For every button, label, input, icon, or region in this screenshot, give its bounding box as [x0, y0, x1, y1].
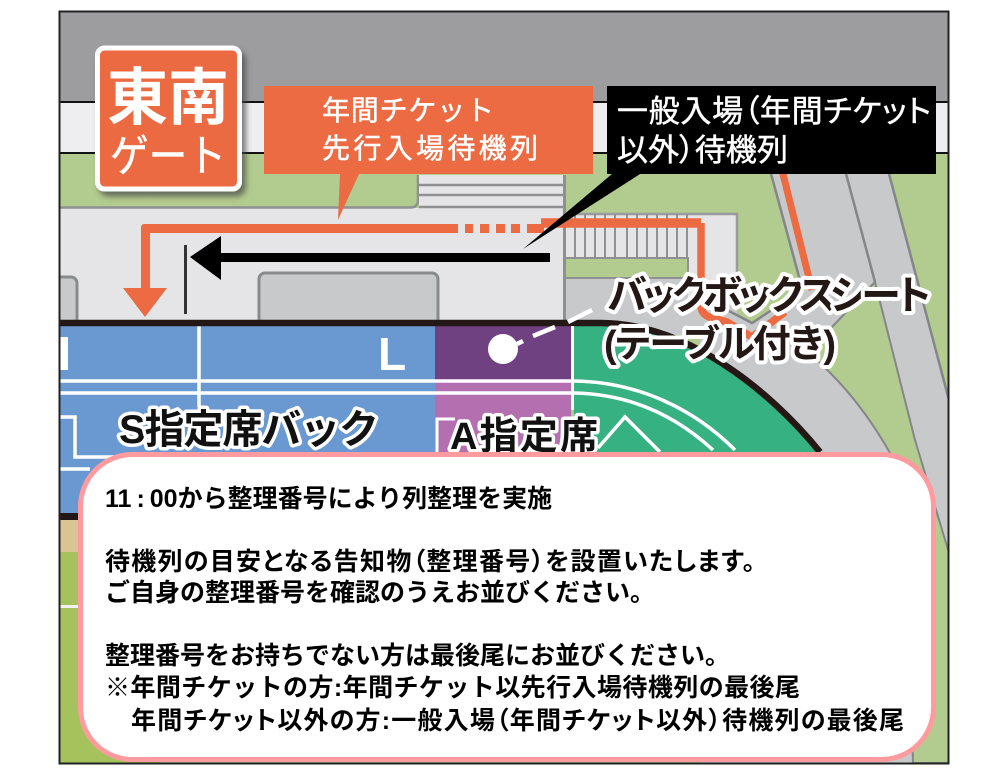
seating: S reserved back	[60, 326, 435, 513]
label: L: L	[378, 328, 406, 380]
notice text: 年間チケット以外の方:一般入場（年間チケット以外）待機列の最後尾	[131, 707, 904, 735]
arrow: black general queue	[190, 236, 550, 280]
seating: back box	[435, 326, 571, 380]
notice text: 11:00から整理番号により列整理を実施	[105, 485, 552, 513]
label: back box seat	[604, 274, 933, 366]
arrow: orange priority queue	[123, 224, 544, 317]
gate sign	[98, 48, 240, 189]
black outline	[60, 323, 820, 452]
callout: general queue: 一般入場（年間チケット	[617, 94, 931, 129]
seating: green section	[574, 326, 816, 452]
label: S seats: S指定席バック	[119, 408, 379, 452]
icon: vertical tick	[184, 245, 187, 314]
notice text: ご自身の整理番号を確認のうえお並びください。	[105, 578, 655, 607]
label: back box seat: バックボックスシート	[607, 274, 933, 318]
callout: general queue	[523, 86, 936, 249]
seating: A reserved	[435, 379, 571, 452]
label: back box seat: (テーブル付き)	[604, 323, 836, 366]
callout: priority queue: 先行入場待機列	[322, 133, 538, 164]
notice text	[105, 485, 904, 735]
marker: back box seat	[488, 310, 592, 364]
gate sign: 東南	[107, 64, 229, 133]
notice text: 整理番号をお持ちでない方は最後尾にお並びください。	[105, 642, 730, 670]
notice panel	[80, 454, 934, 760]
label: A seats: A指定席	[450, 416, 598, 458]
callout: general queue: 以外）待機列	[617, 133, 788, 168]
callout: priority queue: 年間チケット	[322, 95, 494, 126]
building blocks	[60, 272, 440, 320]
gate sign: ゲート	[110, 132, 226, 181]
callout: priority queue	[264, 86, 593, 220]
notice text: 待機列の目安となる告知物（整理番号）を設置いたします。	[105, 548, 755, 576]
notice text: ※年間チケットの方:年間チケット以先行入場待機列の最後尾	[105, 674, 800, 702]
